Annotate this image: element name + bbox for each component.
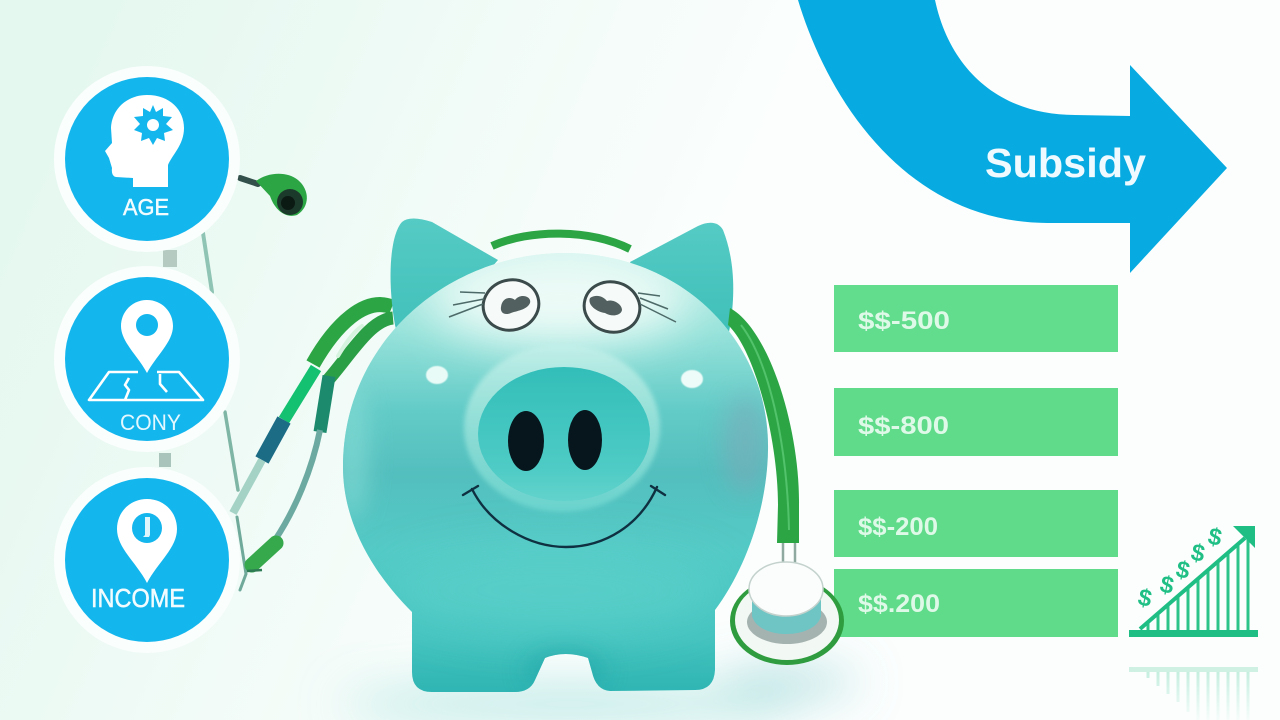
- icon: head with gear: [105, 95, 184, 187]
- icon: income pin: [117, 499, 177, 583]
- chart base: [1129, 630, 1258, 637]
- circle: income: [54, 467, 240, 653]
- chart reflection: [1129, 667, 1258, 720]
- pig snout: [464, 344, 660, 512]
- pig floor shadow: [340, 670, 860, 720]
- dollar signs: $: [1136, 584, 1155, 613]
- label: county: CONY: [120, 410, 181, 435]
- dollar signs: $: [1189, 539, 1208, 568]
- pig eye: left: [449, 274, 545, 336]
- green subsidy bars: [834, 285, 1118, 637]
- bar 2: $$-800: [858, 412, 949, 440]
- stethoscope: tube over pig top: [492, 234, 630, 249]
- dollar signs: $: [1174, 556, 1193, 585]
- growth chart icon: [1129, 523, 1258, 637]
- bar 3: $$-200: [858, 513, 938, 541]
- stethoscope: right tube and chest piece: [728, 308, 844, 665]
- circle: age: [54, 66, 240, 252]
- arrow label: Subsidy: [985, 140, 1146, 186]
- label: income: INCOME: [91, 583, 185, 613]
- tube: [728, 308, 799, 543]
- chest piece: [730, 562, 844, 665]
- icon: map pin: [121, 300, 173, 373]
- stethoscope: left tubes: [233, 305, 393, 571]
- circle: county: [54, 266, 240, 452]
- bar 4: [834, 569, 1118, 637]
- bar 2: [834, 388, 1118, 456]
- bar 1: [834, 285, 1118, 352]
- pig body: [336, 250, 768, 692]
- dollar signs: $: [1206, 523, 1225, 552]
- chart arrow: [1140, 538, 1245, 629]
- stethoscope: thin tubes behind circles: [159, 233, 246, 590]
- dollar signs: [1136, 523, 1225, 613]
- label: age: AGE: [123, 194, 169, 220]
- nostril: right: [568, 410, 602, 470]
- bar 4: $$.200: [858, 590, 940, 618]
- piggy bank: [336, 218, 768, 692]
- bar 1: $$-500: [858, 307, 950, 335]
- ear: right: [630, 223, 733, 332]
- pig smile: [463, 486, 665, 547]
- pig eye: right: [578, 276, 676, 338]
- bar 3: [834, 490, 1118, 557]
- curved subsidy arrow: [798, 0, 1227, 273]
- ear: left: [391, 218, 498, 350]
- chart stripes: [1148, 537, 1248, 631]
- icon: map: [89, 372, 203, 400]
- nostril: left: [508, 411, 544, 471]
- dollar signs: $: [1158, 571, 1177, 600]
- stethoscope earpiece: [240, 174, 307, 216]
- arrow shape: [798, 0, 1227, 273]
